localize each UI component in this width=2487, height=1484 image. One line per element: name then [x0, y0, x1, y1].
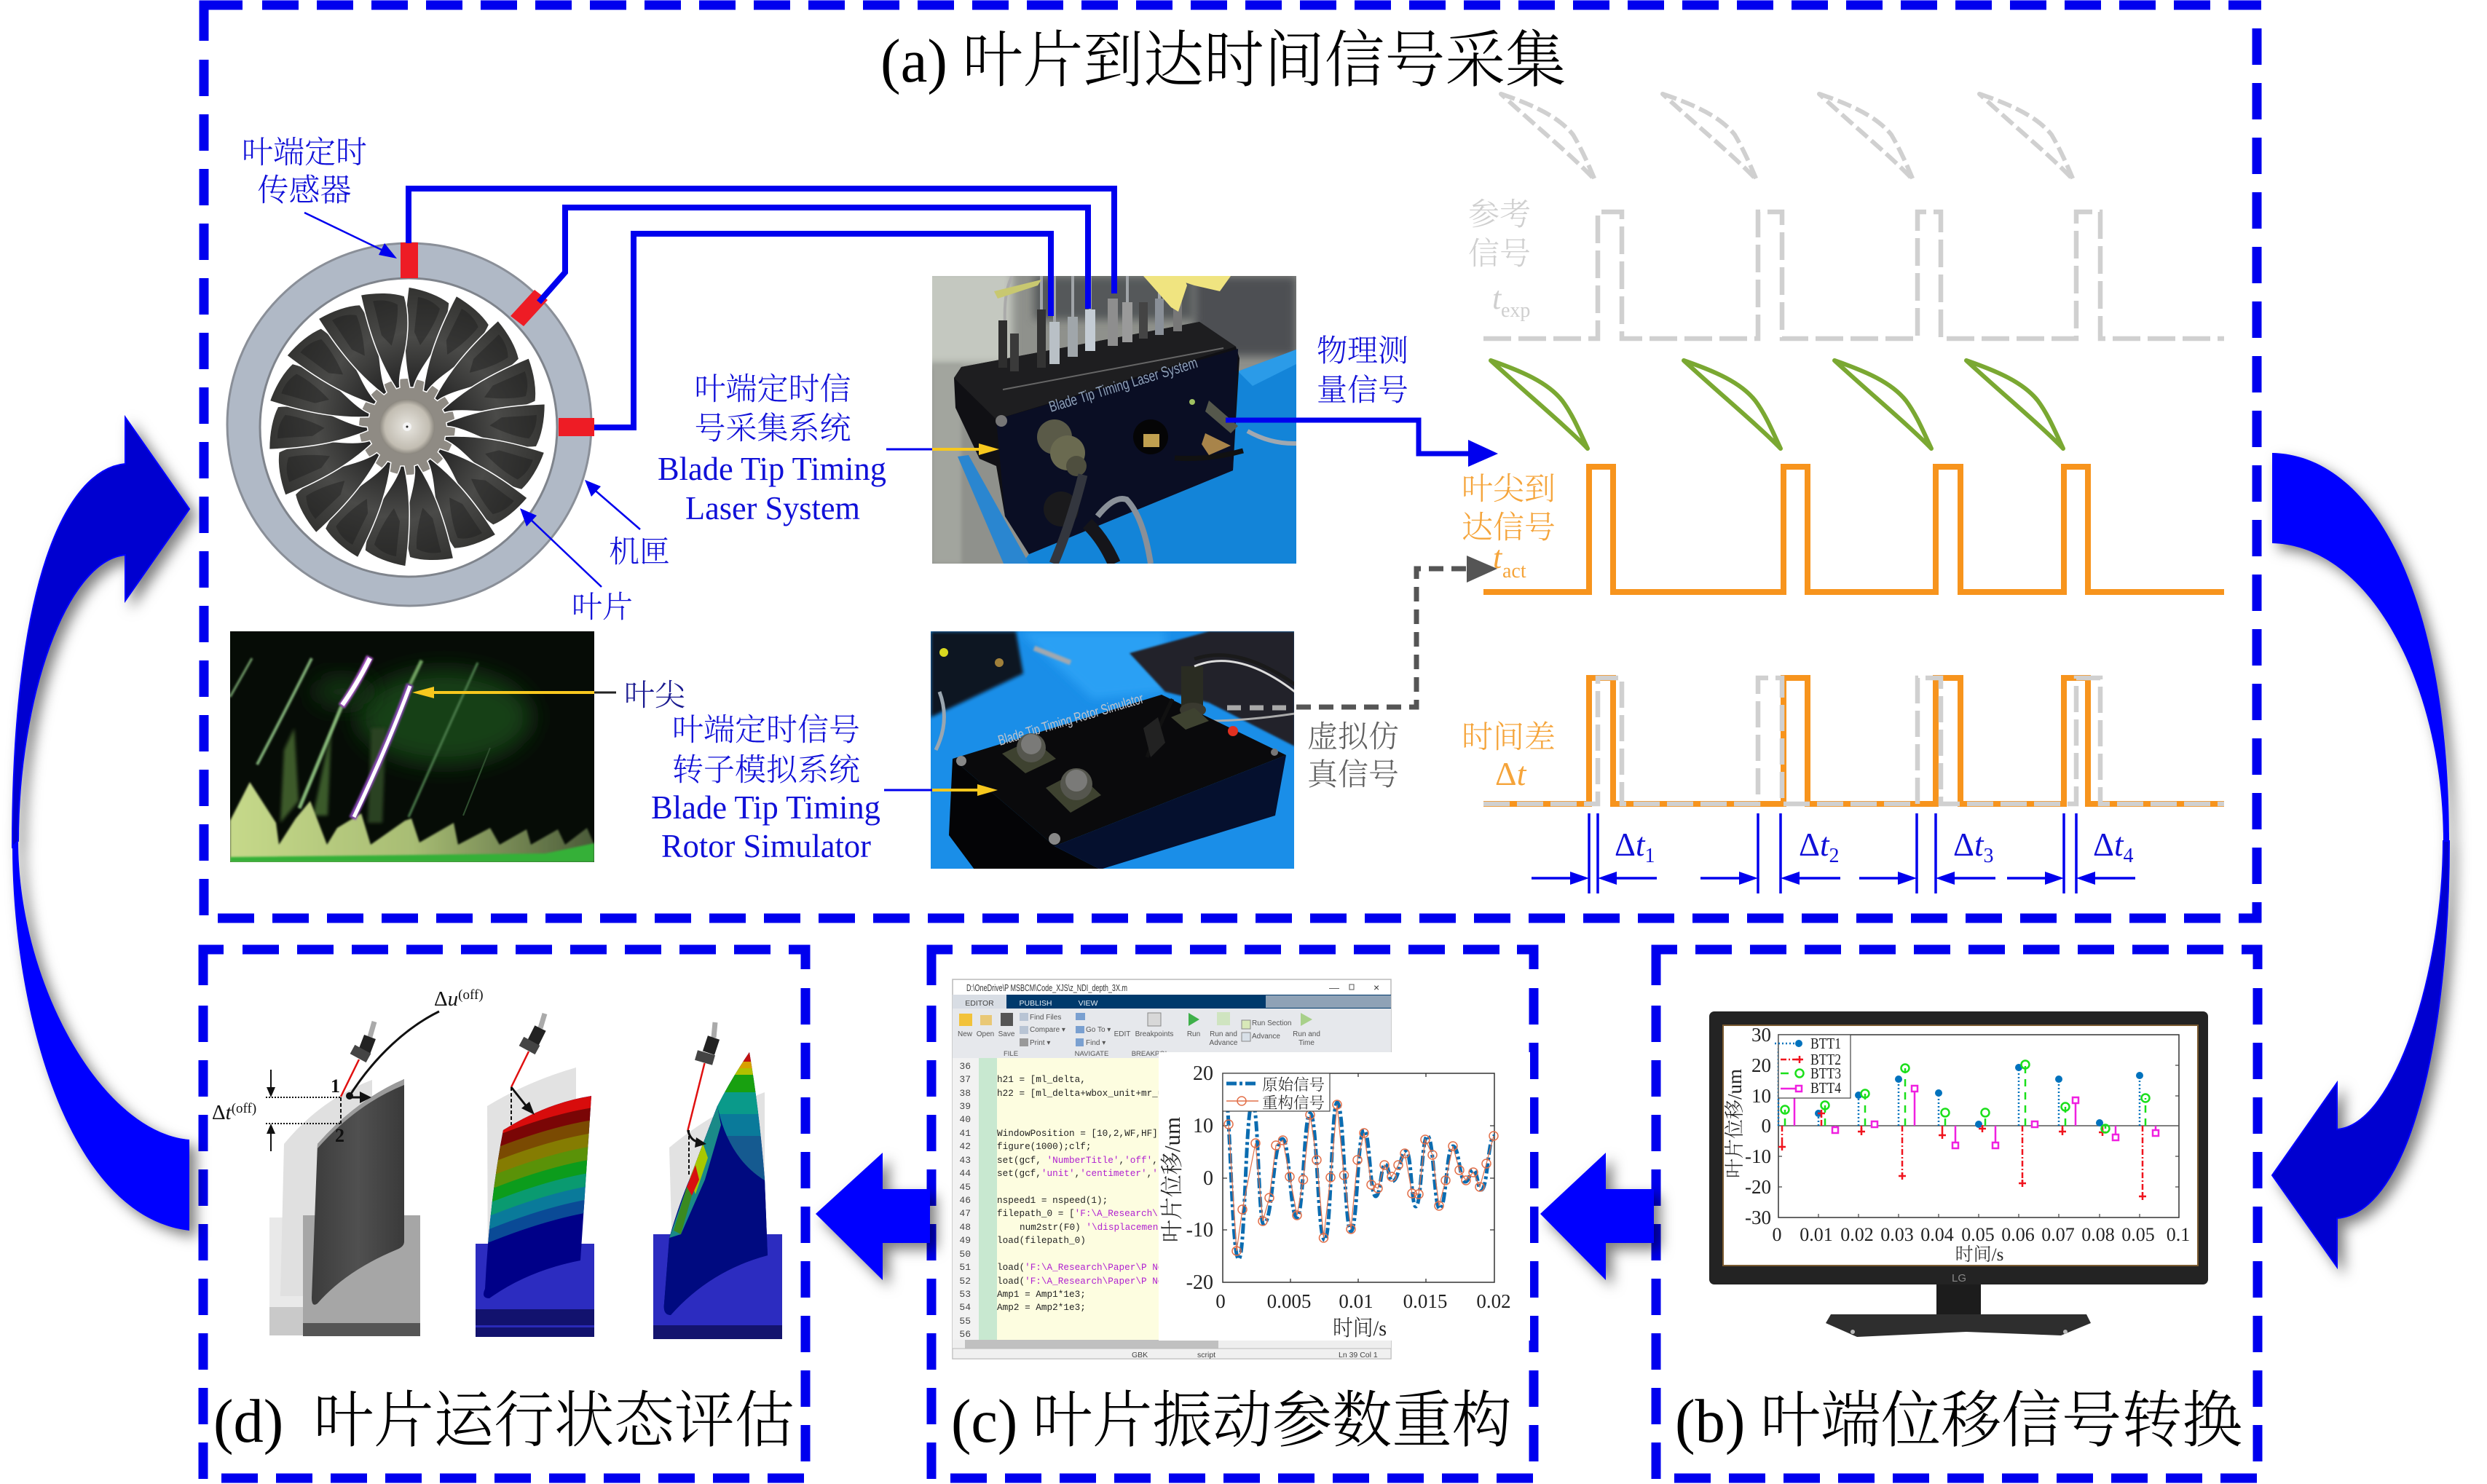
- chart: reconstructed vibration signal: [1159, 1062, 1511, 1341]
- reference blades dashed: [1501, 94, 2073, 180]
- panel: (b) frame: [1656, 950, 2258, 1479]
- illustration: torsion mode blade: [653, 1049, 782, 1339]
- labels: delta t 1 to 4: Δt: [1799, 826, 1829, 863]
- axis titles: 叶片位移/um: [1724, 1069, 1746, 1178]
- dimension lines and annotations for deflection: (off): [458, 987, 484, 1003]
- arrow: blade tip pointer: [412, 687, 616, 698]
- MATLAB editor window: 42: [959, 1141, 971, 1152]
- label: blade tip timing rotor simulator: 叶端定时信号: [672, 713, 860, 748]
- x tick labels: [1215, 1290, 1511, 1312]
- ribbon labels: Run Section: [1252, 1019, 1291, 1027]
- label: blade tip timing rotor simulator: 转子模拟系统: [672, 754, 860, 788]
- legend BTT: BTT1: [1810, 1035, 1841, 1052]
- ribbon labels: New: [958, 1030, 973, 1038]
- ribbon labels: Run: [1187, 1030, 1200, 1038]
- MATLAB editor window: 40: [959, 1114, 971, 1125]
- MATLAB editor window: 51: [959, 1262, 971, 1273]
- y axis labels: -30: [1745, 1207, 1771, 1228]
- label: virtual simulated signal: 真信号: [1307, 758, 1399, 792]
- round connectors: [1037, 419, 1072, 454]
- MATLAB editor window: 56: [959, 1329, 971, 1340]
- MATLAB editor window: —: [1329, 982, 1339, 993]
- series BTT2: [1778, 1110, 2146, 1200]
- axis titles: 叶片位移/um: [1159, 1117, 1185, 1242]
- x axis labels: 0: [1773, 1224, 1781, 1245]
- photo: laser system hardware: Blade Tip Timing Laser System: [1047, 355, 1199, 416]
- actual blades green: [1491, 360, 2063, 449]
- MATLAB editor window: 46: [959, 1195, 971, 1206]
- x axis labels: [1773, 1224, 2190, 1245]
- axis titles: [1724, 1069, 2003, 1265]
- MATLAB editor window: 49: [959, 1235, 971, 1246]
- labels: delta t 1 to 4: 3: [1983, 845, 1993, 867]
- legend BTT: BTT2: [1810, 1051, 1841, 1068]
- panel: (a) blade arrival time signal acquisition frame: [204, 5, 2261, 923]
- x axis labels: 0.1: [2167, 1224, 2190, 1245]
- ribbon labels: BREAKPOI: [1132, 1050, 1167, 1058]
- blue sensor cables: [409, 189, 1114, 427]
- ribbon labels: EDIT: [1114, 1030, 1130, 1038]
- label: tip timing sensor: [242, 136, 367, 208]
- curved arrow: left, d to a: [12, 417, 189, 1231]
- legend BTT: BTT4: [1810, 1079, 1841, 1097]
- MATLAB editor window: num2str(F0) '\displacement: [1020, 1222, 1164, 1233]
- x axis labels: 0.07: [2041, 1224, 2075, 1245]
- MATLAB editor window: D:\OneDrive\P MSBCM\Code_XJS\z_NDI_depth_3X.m: [966, 982, 1127, 993]
- ribbon labels: Advance: [1210, 1039, 1238, 1047]
- label: reference signal: exp: [1501, 299, 1530, 322]
- MATLAB editor window: 44: [959, 1168, 971, 1179]
- arrow: to sensor: [304, 213, 397, 258]
- photo: blade tips under strobe: [230, 631, 594, 862]
- panel: (c) frame: [931, 950, 1534, 1479]
- dimension lines and annotations for deflection: Δu: [434, 987, 458, 1011]
- legend BTT: BTT3: [1810, 1065, 1841, 1082]
- MATLAB editor window: load('F:\A_Research\Paper\P Ne: [997, 1262, 1163, 1273]
- original signal: [1223, 1078, 1494, 1259]
- y tick labels: -20: [1186, 1271, 1213, 1294]
- label: time difference: [1462, 721, 1556, 792]
- labels: delta t 1 to 4: Δt: [2093, 826, 2123, 863]
- icon: probes: [341, 1014, 715, 1130]
- labels: delta t 1 to 4: Δt: [1953, 826, 1983, 863]
- dimension lines and annotations for deflection: 1: [331, 1075, 340, 1097]
- ribbon labels: Breakpoints: [1135, 1030, 1173, 1038]
- title: panel b: (b) 叶端位移信号转换: [1675, 1387, 2242, 1456]
- block arrow: b to c: [1540, 1153, 1654, 1280]
- label: blade tip timing laser system: Laser System: [685, 489, 860, 526]
- labels: delta t 1 to 4: 4: [2123, 845, 2133, 867]
- MATLAB editor window: ×: [1373, 982, 1379, 993]
- label: time difference: 时间差: [1462, 721, 1556, 755]
- labels: delta t 1 to 4: Δt: [1615, 826, 1644, 863]
- label: physical measured signal: [1317, 335, 1408, 408]
- title: panel a: (a) 叶片到达时间信号采集: [880, 27, 1566, 95]
- x tick labels: 0.005: [1267, 1290, 1311, 1312]
- MATLAB editor window: 55: [959, 1316, 971, 1327]
- arrow: laser system pointer: [886, 443, 999, 455]
- photo: rotor simulator hardware: Blade Tip Timing Rotor Simulator: [996, 691, 1146, 749]
- MATLAB editor window: set(gcf,'unit','centimeter','p: [997, 1168, 1163, 1179]
- monitor: LG: [1952, 1272, 1966, 1284]
- legend: 原始信号: [1262, 1076, 1325, 1094]
- y axis labels: 10: [1751, 1085, 1771, 1107]
- labels: delta t 1 to 4: [1615, 826, 2133, 867]
- label: blade tip timing laser system: 号采集系统: [695, 411, 851, 446]
- MATLAB editor window: load(filepath_0): [997, 1235, 1086, 1246]
- reference signal waveform: [1483, 212, 2224, 339]
- scrollbar and status bar: [953, 1340, 1391, 1349]
- MATLAB editor window: 48: [959, 1222, 971, 1233]
- MATLAB editor window: figure(1000);clf;: [997, 1141, 1091, 1152]
- label: virtual simulated signal: [1307, 721, 1399, 792]
- label: blade tip timing rotor simulator: Blade Tip Timing: [651, 789, 880, 826]
- label: virtual simulated signal: 虚拟仿: [1307, 721, 1399, 754]
- MATLAB editor window: 50: [959, 1249, 971, 1260]
- x tick labels: 0.015: [1403, 1290, 1447, 1312]
- x tick labels: 0: [1215, 1290, 1226, 1312]
- label: reference signal: 信号: [1468, 237, 1531, 272]
- icon: turbofan casing and blades: [227, 243, 591, 606]
- illustration: blade undeformed with offset: [269, 1079, 420, 1336]
- MATLAB editor window: 47: [959, 1208, 971, 1219]
- labels: delta t 1 to 4: 2: [1829, 845, 1839, 867]
- label: physical measured signal: 量信号: [1317, 374, 1408, 408]
- y axis labels: 30: [1751, 1024, 1771, 1046]
- tip arrival waveform: [1483, 467, 2224, 592]
- label: time difference: Δt: [1495, 755, 1527, 792]
- icon: red tip timing sensors: [401, 242, 594, 436]
- y tick labels: -10: [1186, 1219, 1213, 1242]
- MATLAB editor window: GBK: [1132, 1351, 1148, 1359]
- label: blade tip timing laser system: [658, 372, 886, 526]
- arrow: to blade: [520, 508, 602, 587]
- ribbon labels: Open: [977, 1030, 994, 1038]
- label: blade tip: 叶尖: [624, 679, 685, 713]
- ribbon labels: Run and: [1293, 1030, 1320, 1038]
- MATLAB editor window: load('F:\A_Research\Paper\P Ne: [997, 1276, 1163, 1287]
- y tick labels: 20: [1193, 1062, 1213, 1085]
- MATLAB editor window: 45: [959, 1182, 971, 1193]
- label: physical measured signal: 物理测: [1317, 335, 1408, 368]
- ribbon labels: Go To ▾: [1086, 1026, 1111, 1034]
- series BTT3: [1781, 1060, 2150, 1133]
- label: blade tip timing laser system: Blade Tip Timing: [658, 450, 886, 487]
- code area: [953, 1058, 979, 1340]
- monitor: [1709, 1011, 2208, 1337]
- ribbon labels: [958, 1014, 1320, 1058]
- label: tip arrival signal: act: [1502, 560, 1526, 583]
- y axis labels: 20: [1751, 1054, 1771, 1076]
- ribbon labels: Find ▾: [1086, 1039, 1105, 1047]
- MATLAB editor window: 52: [959, 1276, 971, 1287]
- ribbon labels: Advance: [1252, 1033, 1280, 1041]
- ribbon labels: Find Files: [1030, 1014, 1061, 1022]
- arrow: to casing: [585, 480, 640, 529]
- dimension lines and annotations for deflection: 2: [335, 1125, 344, 1146]
- time difference waveforms overlay: [1483, 678, 2224, 804]
- legend: 重构信号: [1262, 1094, 1325, 1112]
- label: blade tip timing rotor simulator: [651, 713, 880, 864]
- arrow: physical signal: [1226, 420, 1498, 467]
- x tick labels: 0.02: [1476, 1290, 1511, 1312]
- ribbon labels: NAVIGATE: [1075, 1050, 1108, 1058]
- x axis labels: 0.05: [2121, 1224, 2155, 1245]
- chart: blade tip displacement stems: [1724, 1024, 2190, 1265]
- y tick labels: [1186, 1062, 1213, 1294]
- labels: delta t 1 to 4: 1: [1644, 845, 1655, 867]
- series BTT4: [1794, 1086, 2159, 1148]
- cables above connectors: [1003, 276, 1178, 371]
- ribbon labels: Time: [1298, 1039, 1315, 1047]
- ribbon labels: Print ▾: [1030, 1039, 1050, 1047]
- MATLAB editor window: [953, 979, 1391, 1359]
- label: blade: 叶片: [572, 591, 633, 625]
- dimension lines and annotations for deflection: Δt: [212, 1101, 232, 1124]
- ribbon labels: FILE: [1004, 1050, 1018, 1058]
- MATLAB editor window: nspeed1 = nspeed(1);: [997, 1195, 1108, 1206]
- ribbon labels: Compare ▾: [1030, 1026, 1065, 1034]
- MATLAB editor window: 54: [959, 1302, 971, 1313]
- reconstructed signal: [1229, 1105, 1494, 1251]
- MATLAB editor window: 37: [959, 1074, 971, 1085]
- y axis labels: [1745, 1024, 1771, 1228]
- ribbon labels: Save: [998, 1030, 1015, 1038]
- curved arrow: right, a to b: [2272, 453, 2449, 1267]
- label: reference signal: 参考: [1468, 198, 1531, 232]
- label: tip arrival signal: 达信号: [1462, 510, 1556, 545]
- dimension lines and annotations for deflection: (off): [232, 1101, 256, 1116]
- dimension lines and annotations for deflection: [212, 987, 706, 1175]
- arrow: virtual signal: [1227, 556, 1497, 708]
- MATLAB editor window: h22 = [ml_delta+wbox_unit+mr_unit: [997, 1088, 1180, 1099]
- legend: [1223, 1073, 1330, 1112]
- MATLAB editor window: script: [1197, 1351, 1215, 1359]
- MATLAB editor window: filepath_0 = ['F:\A_Research\: [997, 1208, 1158, 1219]
- y tick labels: 10: [1193, 1115, 1213, 1137]
- label: reference signal: [1468, 198, 1531, 322]
- label: tip timing sensor: 传感器: [258, 174, 351, 208]
- MATLAB editor window: EDITOR: [965, 999, 994, 1008]
- x axis labels: 0.05: [1961, 1224, 1995, 1245]
- MATLAB editor window: 39: [959, 1101, 971, 1112]
- label: casing: 机匣: [609, 536, 670, 569]
- label: blade tip timing laser system: 叶端定时信: [695, 372, 851, 407]
- y axis labels: -20: [1745, 1176, 1771, 1198]
- MATLAB editor window: Amp2 = Amp2*1e3;: [997, 1302, 1086, 1313]
- x axis labels: 0.03: [1880, 1224, 1914, 1245]
- x axis labels: 0.02: [1840, 1224, 1874, 1245]
- MATLAB editor window: PUBLISH: [1020, 999, 1052, 1008]
- axis titles: 时间/s: [1955, 1244, 2003, 1265]
- label: reference signal: t: [1492, 280, 1502, 316]
- axis titles: [1159, 1117, 1387, 1341]
- legend BTT: [1775, 1035, 1851, 1098]
- label: blade tip timing rotor simulator: Rotor Simulator: [661, 827, 871, 864]
- panel: (d) frame: [203, 950, 805, 1479]
- x axis labels: 0.04: [1920, 1224, 1954, 1245]
- MATLAB editor window: 43: [959, 1155, 971, 1166]
- y axis labels: 0: [1761, 1115, 1771, 1137]
- ribbon labels: Run and: [1210, 1030, 1237, 1038]
- y axis labels: -10: [1745, 1145, 1771, 1167]
- photo: rotor simulator hardware: [931, 631, 1295, 869]
- ribbon icons: [959, 1012, 1312, 1046]
- block arrow: c to d: [816, 1153, 930, 1280]
- x axis labels: 0.06: [2001, 1224, 2035, 1245]
- series BTT1: [1778, 1049, 2140, 1126]
- photo: laser system hardware: [918, 269, 1296, 564]
- MATLAB editor window: set(gcf, 'NumberTitle','off',: [997, 1155, 1158, 1166]
- arrow: rotor simulator pointer: [884, 784, 998, 796]
- MATLAB editor window: Ln 39 Col 1: [1339, 1351, 1378, 1359]
- title: panel d: (d) 叶片运行状态评估: [213, 1387, 795, 1456]
- label: tip arrival signal: 叶尖到: [1462, 473, 1556, 507]
- MATLAB editor window: WindowPosition = [10,2,WF,HF]: [997, 1128, 1158, 1139]
- title: panel c: (c) 叶片振动参数重构: [951, 1387, 1512, 1456]
- x axis labels: 0.01: [1800, 1224, 1833, 1245]
- MATLAB editor window: 38: [959, 1088, 971, 1099]
- MATLAB editor window: h21 = [ml_delta,: [997, 1074, 1086, 1085]
- MATLAB editor window: VIEW: [1079, 999, 1098, 1008]
- label: tip arrival signal: [1462, 473, 1556, 583]
- white figure backdrop: [1159, 1052, 1530, 1341]
- MATLAB editor window: Amp1 = Amp1*1e3;: [997, 1289, 1086, 1300]
- illustration: first bending mode blade: [473, 1067, 604, 1337]
- axis titles: 时间/s: [1333, 1317, 1387, 1341]
- y tick labels: 0: [1203, 1167, 1213, 1190]
- MATLAB editor window: 53: [959, 1289, 971, 1300]
- MATLAB editor window: 36: [959, 1061, 971, 1072]
- x axis labels: 0.08: [2081, 1224, 2115, 1245]
- x tick labels: 0.01: [1339, 1290, 1373, 1312]
- MATLAB editor window: 41: [959, 1128, 971, 1139]
- label: tip arrival signal: t: [1493, 540, 1503, 575]
- label: tip timing sensor: 叶端定时: [242, 136, 367, 170]
- dimension marks: delta t lines and arrows: [1532, 813, 2135, 893]
